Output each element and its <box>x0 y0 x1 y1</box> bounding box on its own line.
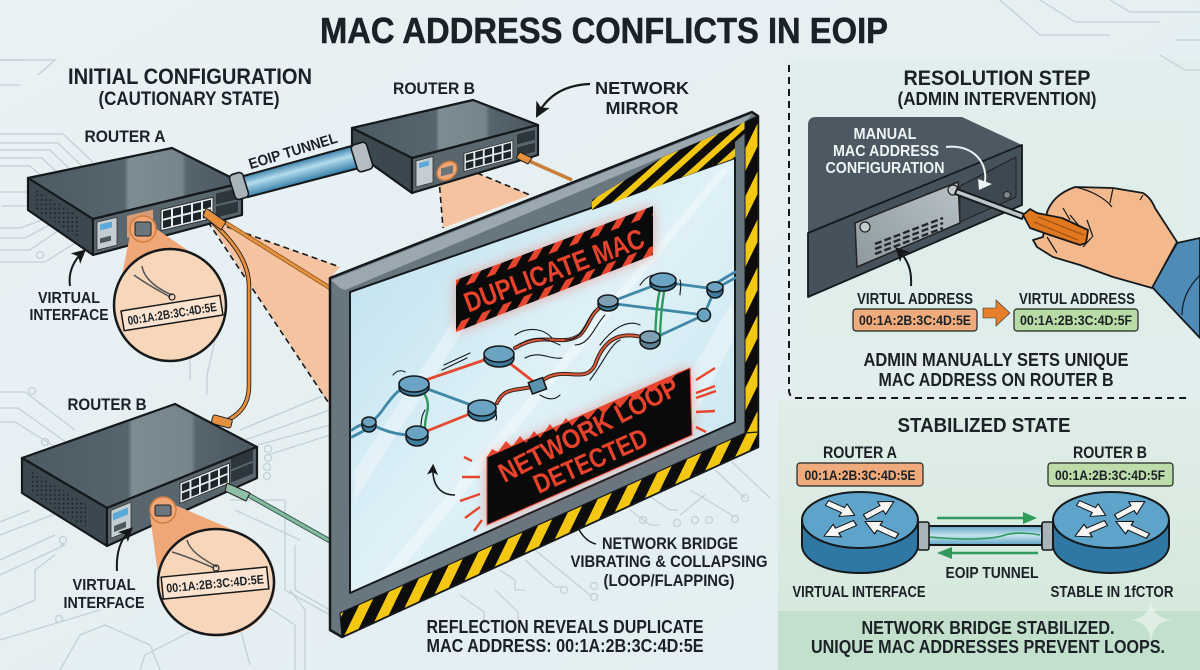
hazard strip: bottom <box>340 432 758 637</box>
black arrow to plate <box>898 250 911 286</box>
arrow: old to new <box>983 300 1010 326</box>
peach beam: router A to monitor <box>208 220 340 405</box>
label: virtual interface A: INTERFACE <box>30 307 109 324</box>
footer band: stabilized caption: NETWORK BRIDGE STABILIZED. <box>862 617 1114 638</box>
screwdriver shaft <box>955 189 1024 219</box>
label: router B lower: ROUTER B <box>68 395 146 414</box>
label: network mirror: NETWORK <box>595 78 689 98</box>
finger lines <box>1047 187 1143 253</box>
label: new virtual address: 00:1A:2B:3C:4D:5F <box>1020 312 1132 328</box>
label: virtual interface B: VIRTUAL <box>72 577 136 594</box>
router chassis close-up <box>808 117 1022 297</box>
green links <box>425 285 665 430</box>
wavy dark links <box>497 303 650 403</box>
EoIP tunnel pipe <box>229 141 374 200</box>
label: virtual interface: VIRTUAL INTERFACE <box>792 584 926 601</box>
alert: network loop detected: NETWORK LOOP <box>494 372 684 488</box>
frame highlight <box>331 114 752 290</box>
label: network mirror <box>538 78 689 118</box>
vibration marks <box>393 275 681 430</box>
label: router A address <box>797 444 923 486</box>
hazard strip: top <box>592 118 758 210</box>
background: resolution panel tint <box>790 60 1200 398</box>
label: router B top: ROUTER B <box>393 79 475 98</box>
label: network bridge vibrating <box>570 528 768 590</box>
network diagram on glass <box>352 272 735 437</box>
label: old virtual address: VIRTUL ADDRESS <box>857 291 973 308</box>
magnifier: router A virtual interface: 00:1A:2B:3C:4D:5E <box>127 300 218 328</box>
label: old virtual address: 00:1A:2B:3C:4D:5E <box>859 312 971 328</box>
label: router B address: 00:1A:2B:3C:4D:5F <box>1055 467 1165 483</box>
wavy red links <box>497 303 650 403</box>
glass streaks <box>355 165 733 578</box>
router B top <box>352 100 538 193</box>
router A <box>28 148 242 255</box>
label: virtual interface A <box>30 252 109 324</box>
label: manual MAC address configuration <box>826 126 944 177</box>
screwdriver handle <box>1023 209 1088 245</box>
label: old virtual address <box>853 291 977 331</box>
hazard strip: right <box>745 116 758 447</box>
label: stable injector: STABLE IN 1fCTOR <box>1050 584 1174 601</box>
label: manual MAC address configuration: CONFIGURATION <box>826 160 944 177</box>
beam dashed edges <box>208 220 340 405</box>
label: router A address: 00:1A:2B:3C:4D:5E <box>804 467 916 483</box>
label: manual MAC address configuration: MAC ADDRESS <box>833 143 939 160</box>
monitor frame <box>330 112 758 637</box>
cable: orange from router A to monitor <box>210 213 330 288</box>
magnifier: router B virtual interface: 00:1A:2B:3C:4D:5E <box>166 572 265 596</box>
caption: reflection reveals duplicate: MAC ADDRESS: 00:1A:2B:3C:4D:5E <box>426 636 704 656</box>
heading: initial configuration <box>68 64 312 110</box>
access plate <box>855 182 960 267</box>
title: MAC ADDRESS CONFLICTS IN EOIP <box>320 10 888 51</box>
label: new virtual address: VIRTUL ADDRESS <box>1019 291 1135 308</box>
sleeve <box>1152 238 1200 338</box>
heading: initial configuration: INITIAL CONFIGURATION <box>68 64 312 89</box>
caption: admin manually sets <box>864 350 1128 390</box>
monitor mirror <box>330 112 758 637</box>
blue links <box>352 272 735 437</box>
network nodes <box>362 273 723 446</box>
label: EoIP tunnel stabilized: EOIP TUNNEL <box>946 565 1038 582</box>
heading: stabilized state: STABILIZED STATE <box>898 414 1070 437</box>
label: network bridge vibrating: (LOOP/FLAPPING) <box>604 572 734 590</box>
cable: green from lower router B to monitor <box>245 493 330 541</box>
caption: admin manually sets: MAC ADDRESS ON ROUTER B <box>878 370 1114 390</box>
label: network bridge vibrating: NETWORK BRIDGE <box>602 535 738 553</box>
router icon A <box>802 492 918 573</box>
label: virtual interface B <box>64 530 145 612</box>
hand with screwdriver <box>955 187 1200 338</box>
alert: network loop detected: DETECTED <box>529 423 652 500</box>
arrow: green backward <box>937 547 1038 559</box>
label: virtual interface B: INTERFACE <box>64 595 145 612</box>
panel: resolution illustration <box>808 117 1200 343</box>
dashed divider <box>789 65 1190 398</box>
tunnel: stable link <box>918 522 1053 550</box>
heading: initial configuration: (CAUTIONARY STATE) <box>98 89 280 110</box>
label: network mirror: MIRROR <box>606 98 679 118</box>
heading: resolution step <box>898 67 1096 109</box>
background: stabilized state panel <box>778 400 1200 670</box>
caption: reflection reveals duplicate <box>426 617 704 656</box>
magnifier: router B virtual interface <box>150 497 275 637</box>
cable: orange from router A down to router B <box>208 217 249 423</box>
heading: resolution step: (ADMIN INTERVENTION) <box>898 88 1096 109</box>
label: network bridge vibrating: VIBRATING & COLLAPSING <box>570 553 768 571</box>
alert: duplicate MAC: DUPLICATE MAC <box>460 223 649 318</box>
label: virtual interface A: VIRTUAL <box>38 290 100 307</box>
label: EoIP tunnel: EOIP TUNNEL <box>247 130 340 173</box>
red links <box>414 355 538 435</box>
cable: orange from top router B to monitor <box>520 157 572 180</box>
label: router B address <box>1048 444 1173 486</box>
caption: reflection reveals duplicate: REFLECTION REVEALS DUPLICATE <box>426 617 704 637</box>
magnifier: router A virtual interface <box>113 216 226 361</box>
caption: admin manually sets: ADMIN MANUALLY SETS UNIQUE <box>864 350 1128 370</box>
curved white arrow <box>946 147 985 182</box>
heading: resolution step: RESOLUTION STEP <box>904 67 1090 90</box>
label: router A: ROUTER A <box>84 127 166 146</box>
small arrow on glass <box>433 467 455 495</box>
label: router A address: ROUTER A <box>823 444 897 462</box>
glass <box>350 158 735 593</box>
label: router B address: ROUTER B <box>1073 444 1147 462</box>
footer band: stabilized caption <box>778 611 1200 670</box>
arrow: green forward <box>937 512 1037 524</box>
label: new virtual address <box>1014 291 1138 331</box>
hand <box>1033 187 1177 288</box>
router B lower <box>22 404 257 546</box>
router icon B <box>1053 492 1169 573</box>
peach beam: router B to monitor <box>438 167 530 228</box>
alert: network loop detected <box>460 368 716 531</box>
label: manual MAC address configuration: MANUAL <box>854 126 917 143</box>
sparkle watermark <box>1130 600 1172 642</box>
